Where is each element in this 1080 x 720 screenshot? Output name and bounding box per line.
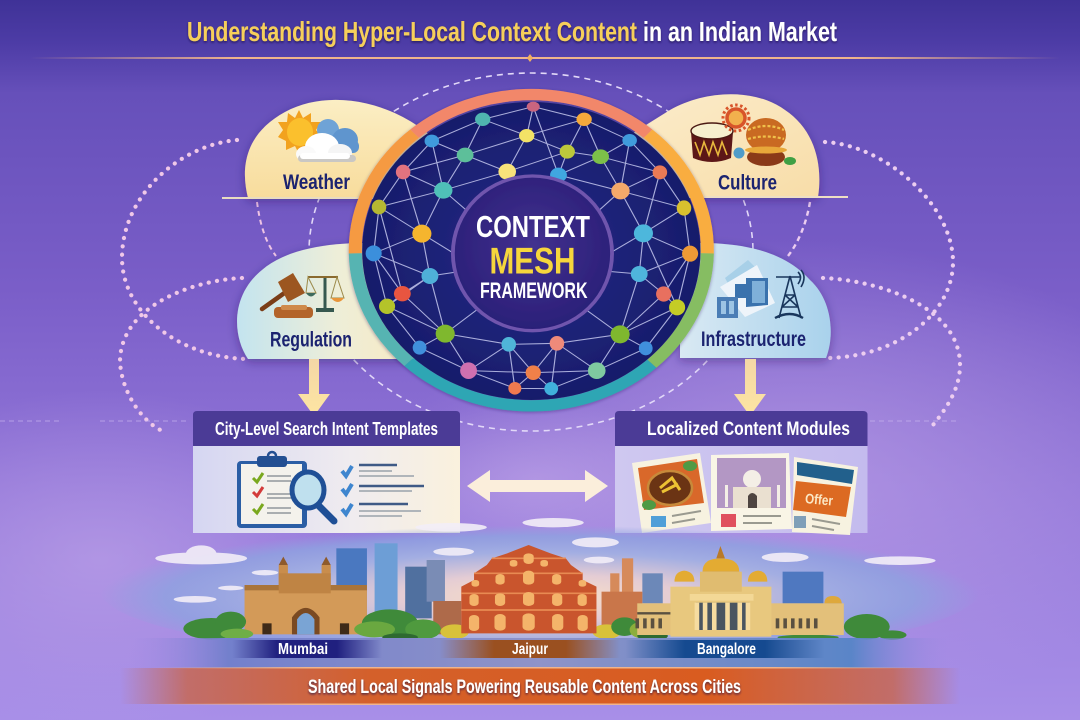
- icon: checklist rows: [342, 465, 424, 516]
- arrow: infrastructure to modules: [734, 359, 766, 416]
- arrow: regulation to templates: [298, 359, 330, 416]
- city skyline illustration: [155, 518, 936, 641]
- panel: weather: [222, 100, 430, 199]
- label: weather: Weather: [283, 171, 350, 194]
- city labels: [278, 641, 756, 658]
- icon: sun and cloud: [278, 110, 359, 162]
- hub text: CONTEXT: [476, 209, 590, 244]
- icon: scales: [306, 277, 344, 310]
- title: Understanding Hyper-Local Context Content: [187, 16, 637, 47]
- landmark: vidhana soudha: [637, 546, 844, 637]
- mesh nodes: [366, 102, 698, 395]
- skyline backdrop: [100, 518, 980, 662]
- bottom banner: Shared Local Signals Powering Reusable Content Across Cities: [308, 677, 741, 698]
- panel: localized content modules: Localized Content Modules: [647, 419, 850, 440]
- towers behind: [336, 543, 823, 634]
- label: infrastructure: Infrastructure: [701, 328, 806, 351]
- river: [130, 638, 950, 668]
- mesh disc: [362, 102, 700, 400]
- mesh links: [374, 107, 690, 389]
- label: culture: Culture: [718, 172, 777, 194]
- icon: clipboard with magnifier: [237, 452, 334, 528]
- hub text: FRAMEWORK: [480, 278, 588, 303]
- title: in an Indian Market: [643, 16, 837, 47]
- icon: decorated pot and sun: [723, 105, 796, 166]
- photo card: monument: [711, 453, 792, 531]
- panel: culture: [630, 94, 848, 198]
- city labels: Mumbai: [278, 641, 328, 658]
- label: regulation: Regulation: [270, 328, 352, 352]
- panel: infrastructure: [680, 243, 831, 358]
- photo card: food: [632, 453, 711, 533]
- ring segments: [355, 95, 707, 406]
- city labels: Jaipur: [512, 641, 548, 658]
- hub text: MESH: [490, 240, 576, 282]
- panel: city-level search intent templates: City-Level Search Intent Templates: [215, 419, 438, 439]
- central hub disc: [453, 176, 612, 331]
- panel: localized content modules: [615, 411, 868, 535]
- clouds: [155, 518, 936, 603]
- dotted connector loops: [0, 73, 960, 432]
- landmark: gateway of india: [245, 557, 367, 634]
- arrow: two-way exchange: [467, 470, 608, 502]
- title divider: [30, 54, 1060, 62]
- icon: servers and card: [717, 260, 775, 318]
- photo card: offer: Offer: [804, 490, 834, 509]
- panel: regulation: [237, 243, 420, 359]
- icon: drum: [691, 123, 733, 162]
- photo card: offer: [792, 457, 858, 535]
- context mesh wheel: [355, 95, 707, 406]
- city labels: Bangalore: [697, 641, 756, 658]
- icon: signal tower: [775, 270, 804, 318]
- panel: city-level search intent templates: [193, 411, 460, 533]
- landmark: hawa mahal: [461, 545, 596, 633]
- icon: gavel: [262, 273, 313, 318]
- trees: [183, 609, 907, 641]
- hub text: [476, 209, 590, 303]
- bottom banner: [120, 667, 960, 705]
